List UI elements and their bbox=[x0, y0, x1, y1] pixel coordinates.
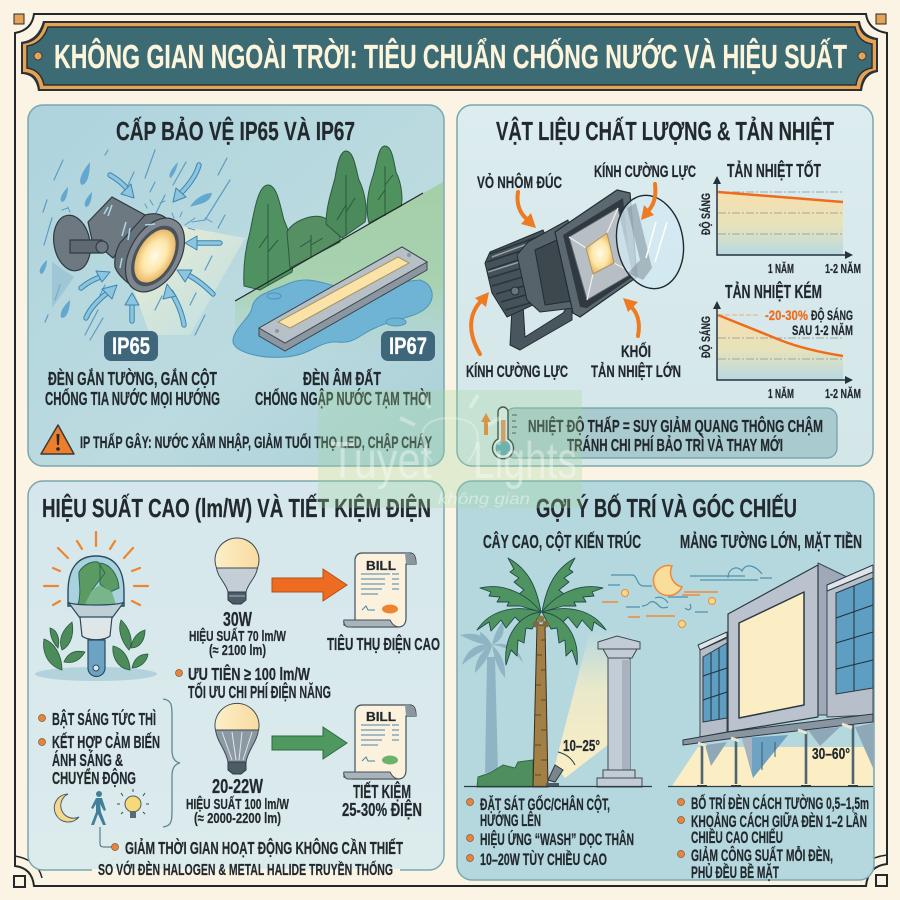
chart: good heat dissipation: 1 NĂM bbox=[768, 261, 794, 276]
caption: IP67: CHỐNG NGẬP NƯỚC TẠM THỜI bbox=[255, 388, 431, 409]
chart: good heat dissipation: ĐỘ SÁNG bbox=[698, 193, 713, 235]
icon: in-ground light bbox=[259, 247, 427, 351]
icon: lit bulb bbox=[117, 789, 149, 818]
illustration: palm tree bbox=[477, 558, 606, 787]
list: tree and column tips: ĐẶT SÁT GỐC/CHÂN CỘT, bbox=[480, 794, 610, 814]
ground lines bbox=[464, 786, 873, 788]
label: beam angle 30-60: 30–60° bbox=[812, 746, 850, 763]
label: savings: 25-30% ĐIỆN bbox=[342, 799, 422, 820]
bracket bbox=[163, 699, 180, 827]
label: 20-22W: HIỆU SUẤT 100 lm/W bbox=[186, 795, 289, 813]
panel: layout and beam angle bbox=[457, 481, 874, 882]
list: instant on and sensors: BẬT SÁNG TỨC THÌ bbox=[52, 708, 156, 729]
label: 30W: (≈ 2100 lm) bbox=[209, 643, 266, 659]
arrows: part callouts bbox=[471, 184, 655, 354]
illustration: night sky bbox=[602, 566, 772, 628]
list: wall and facade tips: CHIỀU CAO CHIẾU bbox=[691, 828, 783, 847]
caption: IP67: ĐÈN ÂM ĐẤT bbox=[303, 368, 381, 389]
chart: poor heat dissipation: TẢN NHIỆT KÉM bbox=[725, 281, 822, 302]
label: 20-22W bbox=[186, 776, 289, 827]
chart: good heat dissipation: TẢN NHIỆT TỐT bbox=[727, 160, 821, 181]
icon: water drops bbox=[40, 162, 212, 318]
callout: low temperature bbox=[505, 408, 837, 458]
caption: IP67 bbox=[255, 368, 431, 409]
icon: thermometer and arrow bbox=[481, 407, 517, 459]
label: 30W: HIỆU SUẤT 70 lm/W bbox=[189, 627, 286, 645]
label: beam angle 10-25: 10–25° bbox=[563, 738, 600, 755]
icon: light beam bbox=[133, 226, 245, 335]
label: 20-22W: (≈ 2000-2200 lm) bbox=[194, 811, 281, 827]
badge: IP65: IP65 bbox=[112, 333, 150, 360]
watermark: Tuyet bbox=[330, 432, 432, 490]
icon: low bill bbox=[344, 705, 416, 779]
icon: water direction arrows bbox=[81, 165, 220, 325]
list: instant on and sensors: KẾT HỢP CẢM BIẾN bbox=[52, 731, 160, 752]
panel: high efficiency bbox=[28, 481, 444, 879]
chart: poor heat dissipation bbox=[698, 281, 861, 401]
label: 30W: 30W bbox=[223, 609, 252, 631]
callout labels: VỎ NHÔM ĐÚC bbox=[477, 173, 562, 192]
label: savings: TIẾT KIỆM bbox=[353, 781, 411, 802]
illustration: bush bbox=[477, 760, 533, 787]
chart: poor heat dissipation: ĐỘ SÁNG bbox=[698, 316, 713, 358]
icon: flood light bbox=[485, 190, 691, 350]
icon: trees bbox=[244, 146, 402, 290]
chart: poor heat dissipation: ĐỘ SÁNG bbox=[811, 308, 853, 323]
watermark: Lights bbox=[473, 432, 577, 490]
illustration: beam on palm and column bbox=[555, 630, 625, 778]
illustration: facade building bbox=[672, 563, 873, 786]
label: savings bbox=[342, 781, 422, 820]
icon: warning triangle bbox=[41, 425, 74, 454]
warning text: IP THẤP GÂY: NƯỚC XÂM NHẬP, GIẢM TUỔI THỌ LED, CHẬP CHÁY bbox=[80, 433, 432, 452]
connector and reduced runtime note bbox=[100, 827, 403, 858]
chart: good heat dissipation: 1-2 NĂM bbox=[825, 261, 861, 276]
panel heading: CẤP BẢO VỆ IP65 VÀ IP67 bbox=[116, 116, 355, 146]
callout labels: TẢN NHIỆT LỚN bbox=[591, 362, 681, 381]
chart: poor heat dissipation: SAU 1-2 NĂM bbox=[792, 323, 853, 338]
illustration: column bbox=[597, 636, 642, 787]
label: high consumption: TIÊU THỤ ĐIỆN CAO bbox=[327, 633, 440, 654]
icon: rain bbox=[43, 150, 230, 340]
slope line bbox=[235, 193, 423, 301]
footnote with border gap bbox=[92, 859, 400, 879]
illustration: ground slope bbox=[235, 182, 443, 352]
label: beam angle 10-25 bbox=[558, 738, 600, 765]
list: tree and column tips: HIỆU ỨNG “WASH” DỌC THÂN bbox=[480, 830, 634, 849]
illustration: background palm bbox=[460, 622, 523, 773]
chart: good heat dissipation bbox=[698, 160, 861, 276]
list: instant on and sensors: ÁNH SÁNG & bbox=[52, 749, 123, 770]
subheading: trees and columns: CÂY CAO, CỘT KIẾN TRÚC bbox=[483, 531, 641, 552]
callout labels: KÍNH CƯỜNG LỰC bbox=[466, 362, 568, 381]
callout labels bbox=[466, 162, 696, 381]
icon: low bill: BILL bbox=[366, 709, 396, 724]
chart: poor heat dissipation: -20-30% bbox=[765, 307, 808, 323]
icon: moon bbox=[54, 794, 79, 822]
connector and reduced runtime note: GIẢM THỜI GIAN HOẠT ĐỘNG KHÔNG CẦN THIẾT bbox=[125, 837, 403, 858]
list: tree and column tips: HƯỚNG LÊN bbox=[480, 811, 541, 830]
icon: high bill: BILL bbox=[366, 558, 396, 573]
arrow: green bbox=[272, 727, 347, 759]
watermark bbox=[318, 390, 582, 508]
tip: prioritise 100 lm/W: TỐI ƯU CHI PHÍ ĐIỆN NĂNG bbox=[188, 681, 331, 702]
icon: ground spotlight bbox=[546, 765, 563, 787]
icon: efficient LED bulb bbox=[215, 703, 259, 774]
icon: eco lamp with globe bbox=[35, 532, 157, 681]
badge: IP67: IP67 bbox=[389, 333, 427, 360]
illustration: water puddle bbox=[233, 280, 432, 357]
label: 30W bbox=[189, 609, 286, 659]
callout labels: KHỐI bbox=[621, 341, 651, 361]
callout: low temperature: TRÁNH CHI PHÍ BẢO TRÌ VÀ THAY MỚI bbox=[567, 434, 783, 455]
caption: IP65 bbox=[45, 368, 220, 409]
tip: prioritise 100 lm/W bbox=[176, 663, 331, 702]
chart: poor heat dissipation: 1-2 NĂM bbox=[825, 386, 861, 401]
panel heading: GỢI Ý BỐ TRÍ VÀ GÓC CHIẾU bbox=[536, 493, 797, 523]
arrow: orange bbox=[272, 569, 347, 601]
caption: IP65: ĐÈN GẮN TƯỜNG, GẮN CỘT bbox=[48, 368, 217, 389]
list: tree and column tips: 10–20W TÙY CHIỀU CAO bbox=[480, 850, 607, 869]
icon: standard LED bulb bbox=[215, 538, 259, 604]
watermark: không gian bbox=[438, 491, 530, 508]
label: 20-22W: 20-22W bbox=[212, 776, 263, 798]
list: wall and facade tips bbox=[678, 793, 869, 882]
list: instant on and sensors bbox=[38, 708, 160, 788]
icon: wall spotlight bbox=[49, 197, 197, 308]
panel heading: HIỆU SUẤT CAO (lm/W) VÀ TIẾT KIỆM ĐIỆN bbox=[42, 493, 431, 523]
chart: poor heat dissipation: 1 NĂM bbox=[768, 386, 794, 401]
tip: prioritise 100 lm/W: ƯU TIÊN ≥ 100 lm/W bbox=[188, 663, 310, 684]
list: tree and column tips bbox=[466, 794, 634, 869]
panel: IP65 and IP67 bbox=[28, 105, 444, 466]
title banner bbox=[21, 21, 878, 91]
list: instant on and sensors: CHUYỂN ĐỘNG bbox=[52, 767, 136, 788]
icon: high bill bbox=[344, 553, 416, 627]
icon: walking person bbox=[91, 791, 106, 825]
list: wall and facade tips: PHỦ ĐỀU BỀ MẶT bbox=[691, 863, 779, 882]
panel: materials and heat dissipation bbox=[457, 105, 873, 466]
caption: IP65: CHỐNG TIA NƯỚC MỌI HƯỚNG bbox=[45, 388, 220, 409]
callout labels: KÍNH CƯỜNG LỰC bbox=[594, 162, 696, 181]
footnote with border gap: SO VỚI ĐÈN HALOGEN & METAL HALIDE TRUYỀN THỐNG bbox=[98, 859, 393, 879]
